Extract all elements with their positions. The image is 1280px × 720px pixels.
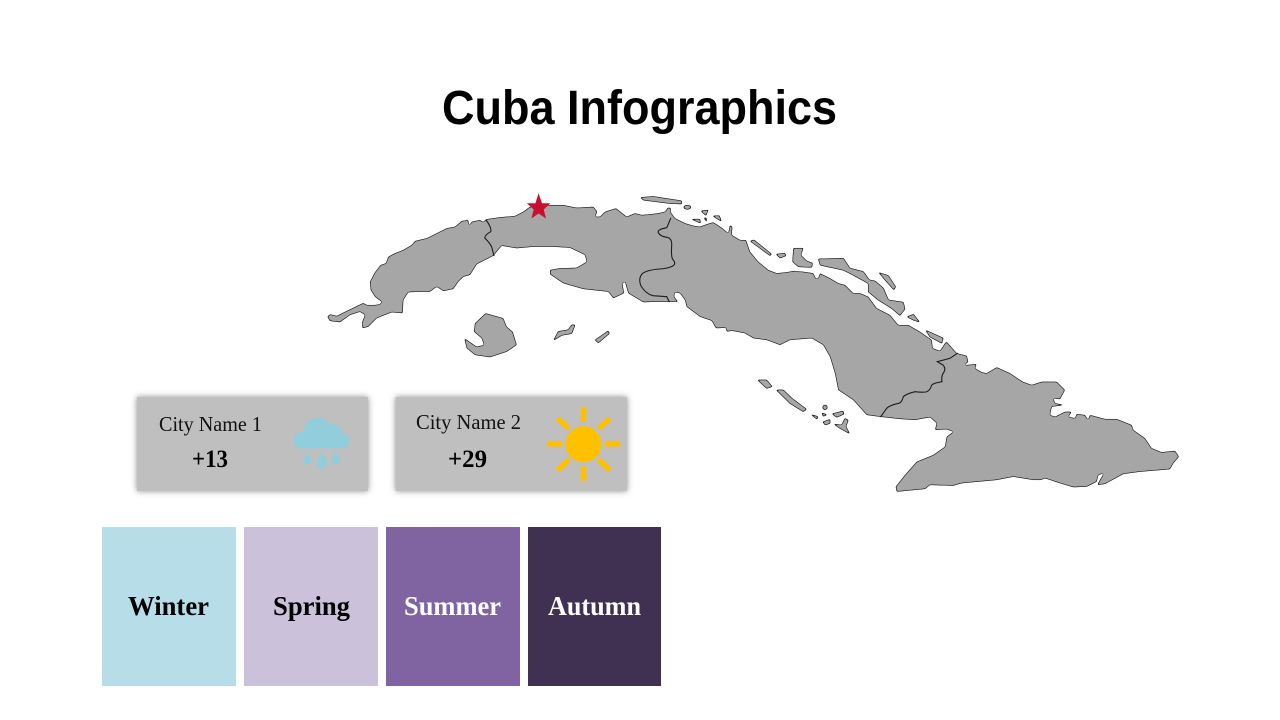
season: Summer [386, 527, 520, 686]
title: Cuba Infographics [442, 82, 837, 135]
season: Autumn: Autumn [548, 591, 641, 621]
season: Spring: Spring [273, 591, 350, 621]
Isla de la Juventud [464, 313, 517, 357]
southern islets [553, 325, 610, 343]
map of Cuba [327, 196, 1179, 492]
icon: sun [547, 407, 620, 481]
southern keys [757, 380, 850, 434]
season: Winter: Winter [128, 591, 209, 621]
season: Winter [102, 527, 236, 686]
province borders [485, 218, 957, 417]
city name 2: City Name 2 [416, 410, 521, 434]
season: Summer: Summer [404, 591, 501, 621]
temperature +29: +29 [448, 446, 487, 473]
city name 1: City Name 1 [159, 412, 262, 436]
card: City Name 1 [137, 397, 368, 491]
temperature +13: +13 [192, 446, 228, 473]
land masses and keys [327, 196, 1179, 492]
season: Autumn [528, 527, 661, 686]
northern keys [640, 196, 944, 344]
main island [327, 205, 1179, 492]
season: Spring [244, 527, 378, 686]
card: City Name 2 [396, 397, 627, 491]
icon: rain cloud [294, 418, 349, 469]
red star: capital marker [527, 193, 550, 218]
